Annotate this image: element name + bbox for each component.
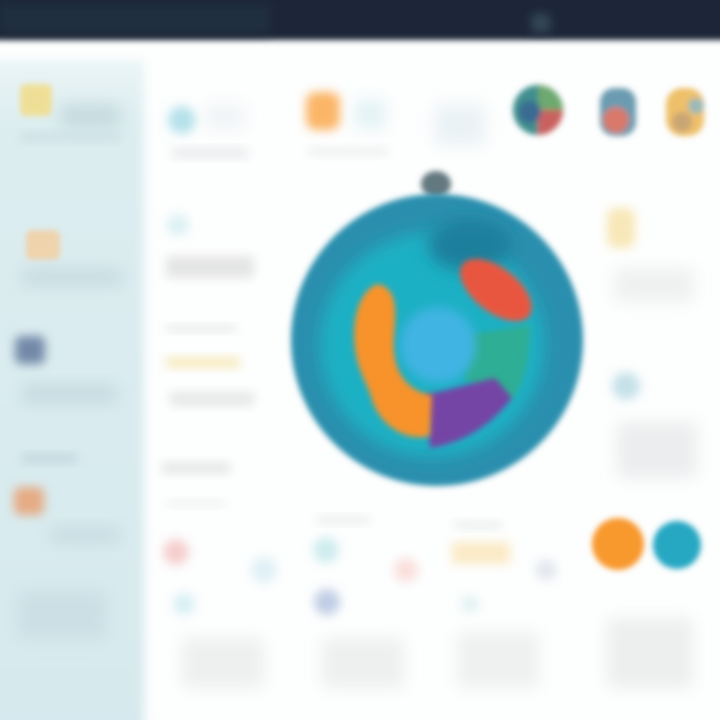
top icon: multicolor badge xyxy=(600,88,636,136)
sidebar item 4 xyxy=(14,454,120,543)
orange arc segment xyxy=(354,284,432,437)
top icon: orange xyxy=(306,92,388,156)
purple segment xyxy=(425,378,512,448)
top icon group: light blue xyxy=(168,105,248,158)
donut chart dial xyxy=(291,194,583,486)
dial inner face xyxy=(320,233,544,457)
bottom-right teal circle xyxy=(653,521,701,569)
bottom text columns xyxy=(173,589,693,688)
panel: left sidebar xyxy=(0,60,144,720)
top text block xyxy=(435,105,485,145)
top icon: yellow badge xyxy=(666,88,704,136)
bottom-right orange circle xyxy=(592,518,644,570)
dark teal shade xyxy=(428,219,512,271)
center blue circle xyxy=(400,307,476,383)
right icon: blue with text xyxy=(612,372,697,478)
sidebar item 3 xyxy=(15,336,117,403)
sidebar item 2 xyxy=(22,230,122,286)
header bar xyxy=(0,0,720,40)
right icon: yellow with text xyxy=(607,208,694,302)
green segment xyxy=(465,325,530,400)
middle-left text blocks xyxy=(162,214,254,507)
dial outer ring xyxy=(291,194,583,486)
top icon: multicolor circle xyxy=(513,85,563,135)
pin on top of dial xyxy=(421,171,451,197)
sidebar item 1 xyxy=(20,84,120,142)
red segment xyxy=(449,247,543,333)
sidebar text block xyxy=(18,592,106,638)
bottom row icons xyxy=(163,516,557,583)
